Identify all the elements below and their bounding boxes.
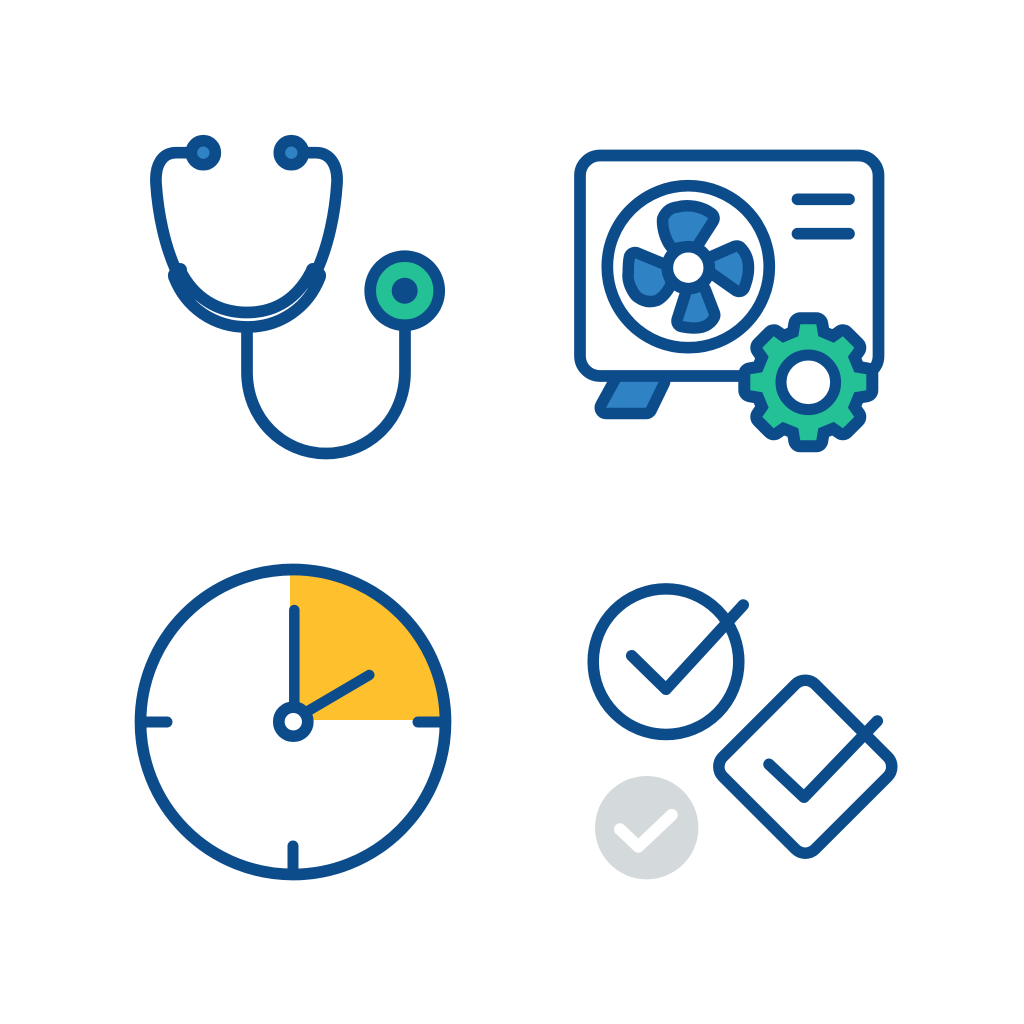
icon: air conditioning unit with gear (580, 156, 878, 440)
left earpiece (191, 141, 215, 165)
chest piece centre (392, 278, 418, 304)
fan ring (607, 186, 769, 348)
hour hand (308, 675, 369, 711)
round check (593, 589, 743, 734)
icon: check marks (593, 589, 898, 879)
gear (750, 324, 866, 440)
vent lines (798, 199, 849, 234)
hour ticks (147, 722, 440, 872)
clock hub (279, 707, 308, 736)
fan hub (667, 247, 709, 289)
minute hand (289, 610, 300, 704)
hanging tube (247, 325, 405, 454)
ear tubes (156, 153, 337, 268)
diamond check (713, 674, 898, 859)
fan blades (634, 212, 743, 322)
yoke (174, 270, 320, 327)
clock rim (140, 570, 446, 874)
yoke end caps (175, 270, 319, 275)
right earpiece (279, 141, 303, 165)
icon: clock with shaded quarter (140, 570, 446, 874)
unit foot (606, 381, 659, 408)
chest piece (370, 256, 439, 325)
grey check (595, 776, 698, 879)
shaded quarter (290, 573, 442, 720)
unit body (580, 156, 878, 376)
icon: stethoscope (156, 141, 439, 453)
